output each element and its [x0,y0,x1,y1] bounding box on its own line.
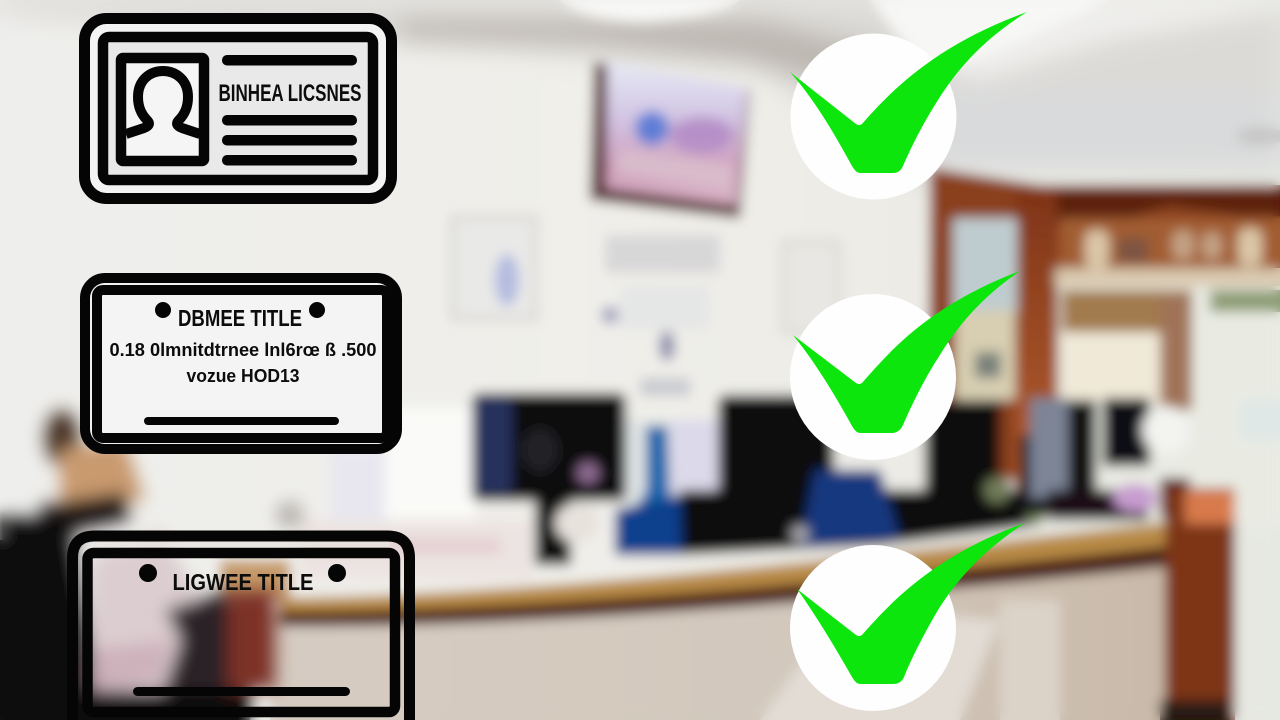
document punch holes [139,564,346,582]
document body text: 0.18 0lmnitdtrnee lnl6rœ ß .500 [110,340,376,360]
check badge 2 [790,271,1020,460]
background: reception desk items [300,520,532,580]
background: wall artwork [452,217,536,319]
background: wood pillar [1165,488,1235,720]
document body text [110,340,376,386]
licence text lines: BINHEA LICSNES [218,80,362,107]
document punch holes [155,302,325,318]
document frame [85,278,397,449]
background: staff member [0,410,304,720]
icon: driver licence card [84,18,392,198]
document heading: DBMEE TITLE [178,305,302,331]
signature line [144,417,339,425]
signature line [133,687,350,696]
icon: title document [85,278,397,449]
background: reception counter [270,548,1165,720]
check badge 3 [790,523,1025,711]
icon: licence title document [72,536,410,720]
background: ceiling [0,0,1280,190]
portrait photo [121,58,204,161]
background: wood panelling [928,168,1280,500]
background: staff member base shadow [0,540,250,720]
card frame [84,18,392,198]
background: wall TV [590,62,750,218]
background: far room [1055,268,1280,286]
document heading: LIGWEE TITLE [172,569,314,595]
licence text lines [218,55,362,166]
check badge 1 [790,12,1027,200]
document body text: vozue HOD13 [186,366,300,386]
document frame [72,536,410,720]
